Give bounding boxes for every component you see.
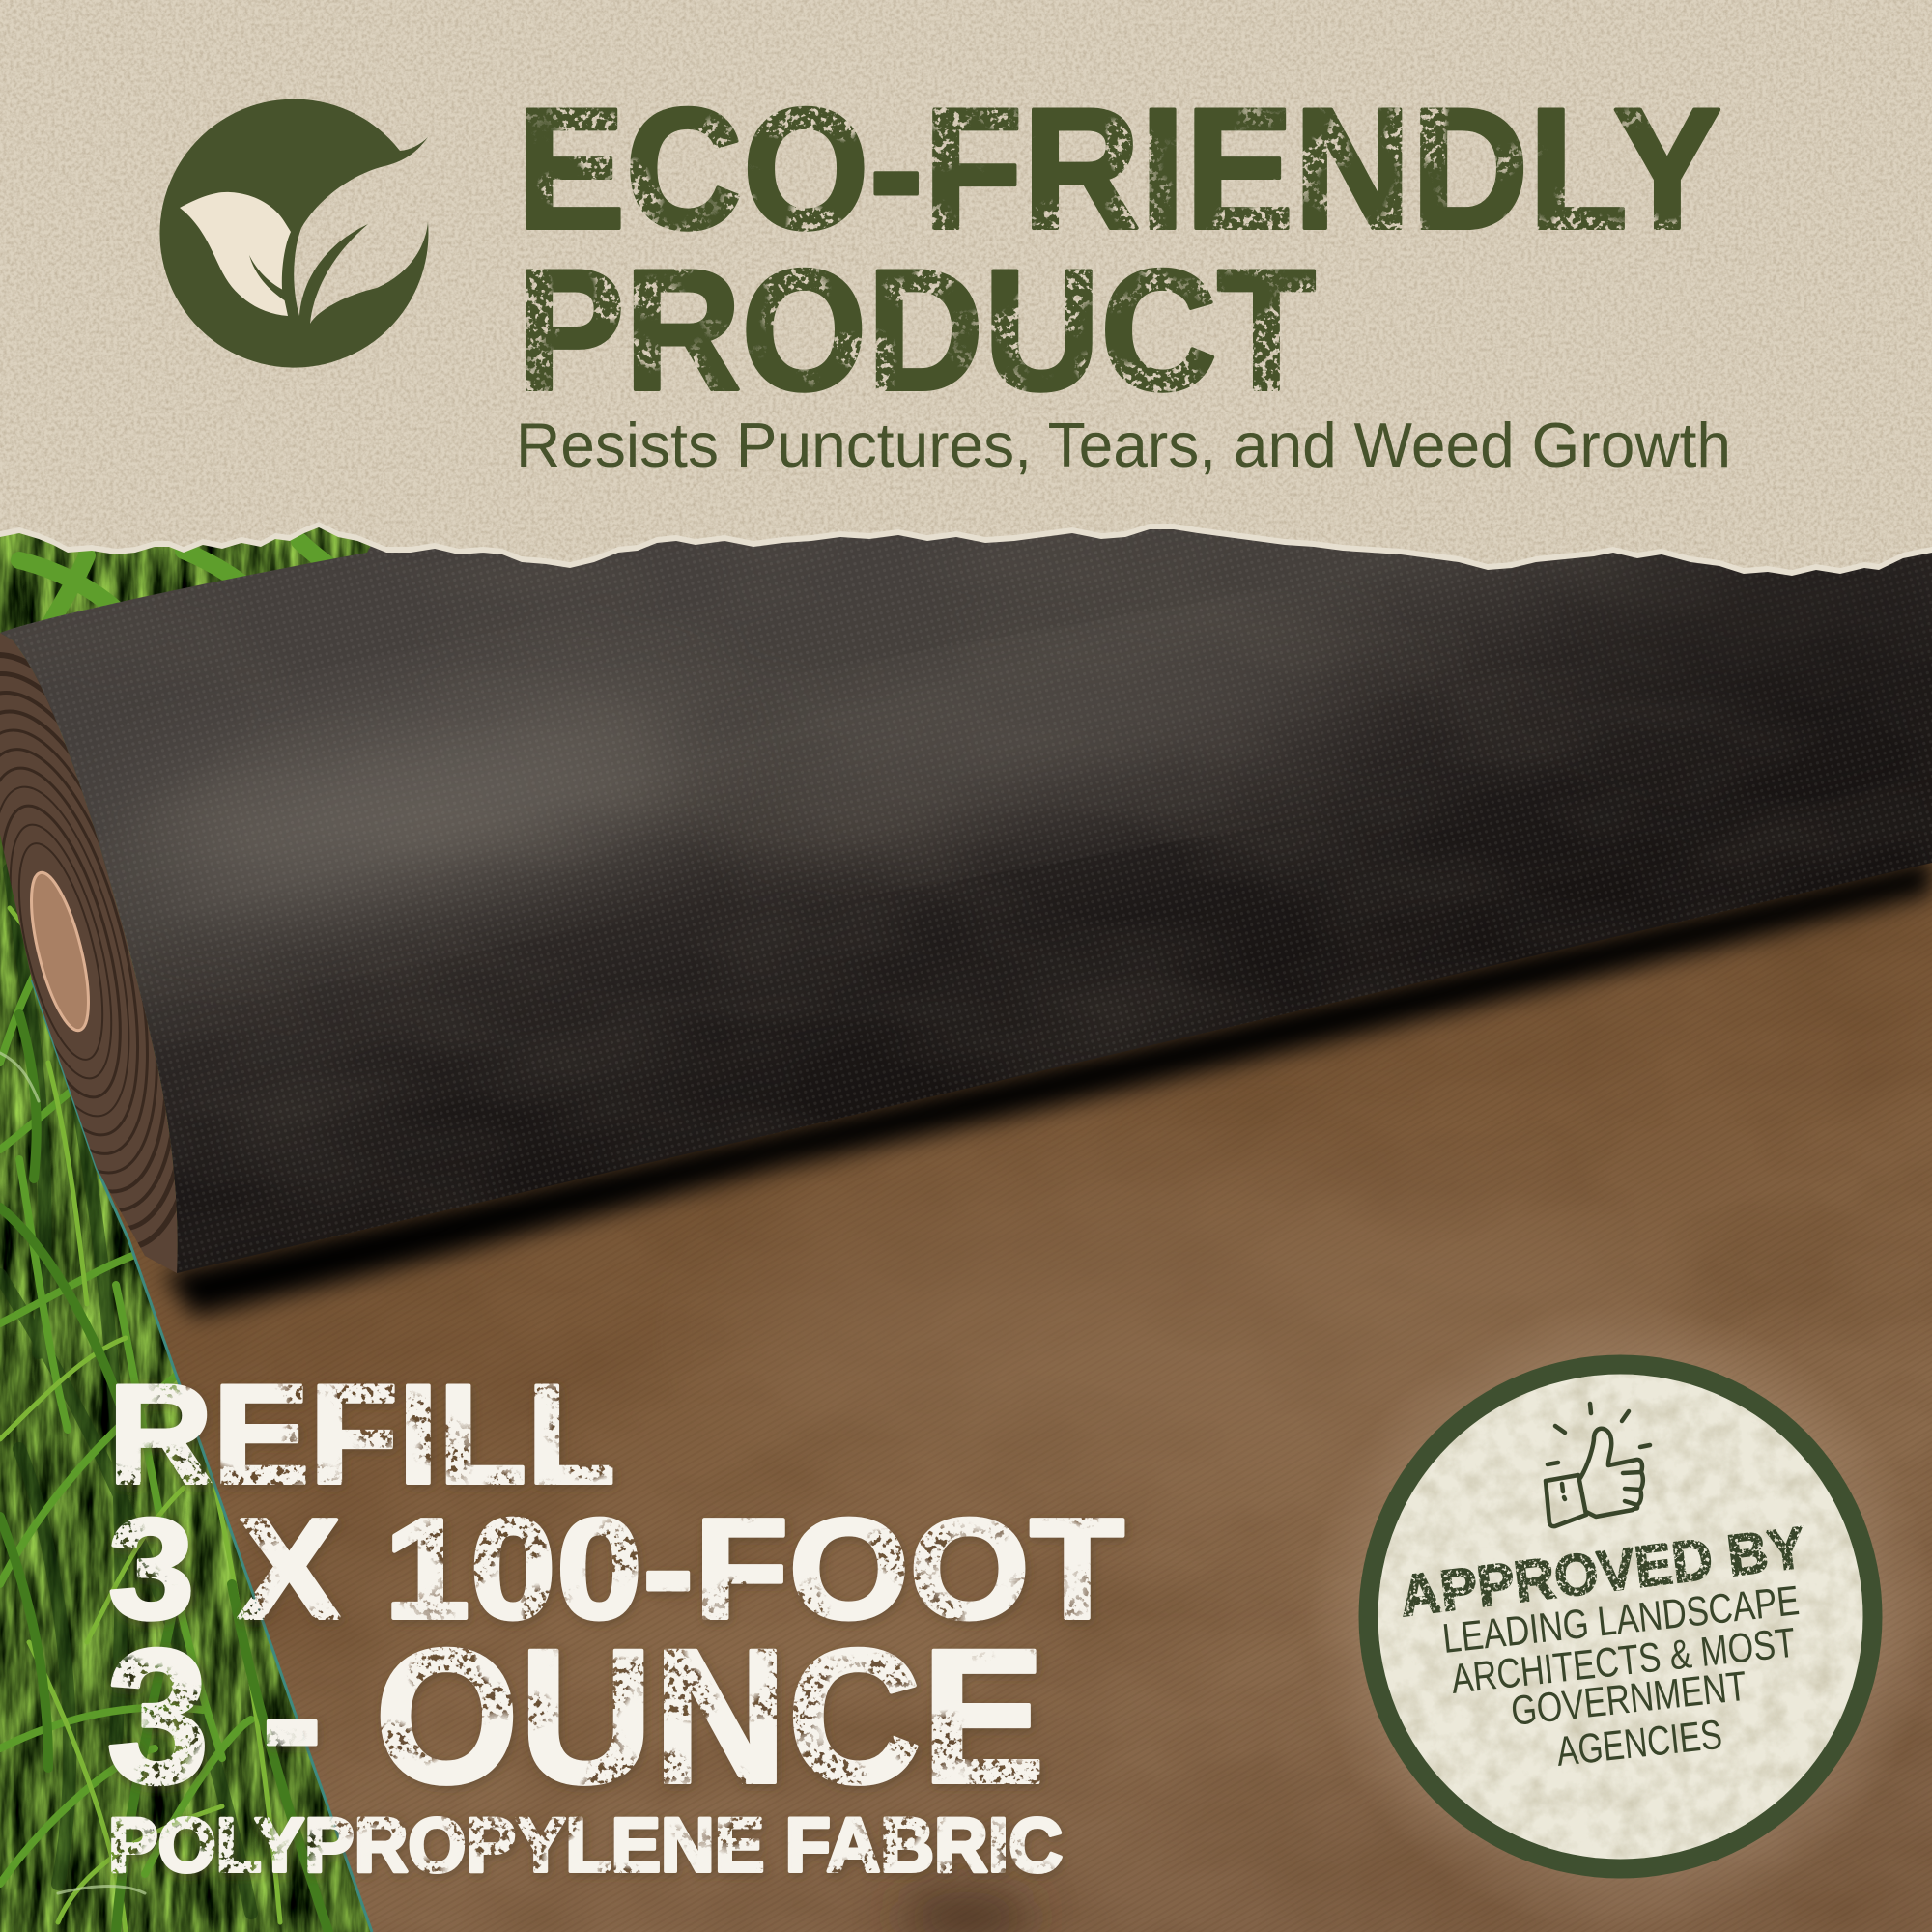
heading line one: ECO-FRIENDLY — [517, 72, 1721, 265]
fabric teal edge — [32, 980, 372, 1932]
detail line three: GOVERNMENT — [1509, 1663, 1749, 1735]
paper surface — [0, 0, 1932, 570]
heading line two: PRODUCT — [517, 234, 1316, 426]
fabric light patch — [724, 1169, 1690, 1497]
approved by detail — [1440, 1577, 1802, 1776]
size line: 3 X 100-FOOT — [108, 1490, 1124, 1649]
title: eco-friendly product — [517, 72, 1721, 426]
icon: eco leaf logo — [159, 99, 428, 368]
roll end cap — [0, 633, 178, 1273]
roll body — [0, 464, 1932, 1273]
torn paper header — [0, 0, 1932, 576]
background: grass — [0, 483, 676, 1932]
cardboard core — [30, 871, 90, 1032]
detail line four: AGENCIES — [1554, 1712, 1724, 1776]
roll highlight — [116, 522, 1932, 943]
product specs text — [106, 1355, 1124, 1888]
brown fabric sheet — [32, 850, 1932, 1932]
icon: thumbs up — [1546, 1404, 1650, 1526]
badge: approved by — [1306, 1303, 1932, 1931]
subtitle: Resists Punctures, Tears, and Weed Growth — [516, 410, 1731, 480]
paper torn fibre edge — [0, 0, 1932, 576]
badge face — [1378, 1374, 1862, 1859]
dark stain at bottom — [898, 1890, 1034, 1932]
weight line: 3 - OUNCE — [106, 1609, 1045, 1823]
detail line one: LEADING LANDSCAPE — [1440, 1577, 1802, 1662]
material line: POLYPROPYLENE FABRIC — [108, 1802, 1063, 1888]
logo cream leaf — [180, 192, 291, 316]
shadow below roll — [164, 858, 1932, 1316]
refill line: REFILL — [108, 1355, 615, 1513]
approved by heading: APPROVED BY — [1396, 1515, 1808, 1629]
badge ring — [1358, 1354, 1882, 1878]
fabric roll — [0, 529, 1932, 1273]
badge halo — [1306, 1303, 1932, 1931]
detail line two: ARCHITECTS & MOST — [1449, 1620, 1798, 1703]
logo small blade — [249, 255, 286, 301]
roll weave texture — [0, 464, 1932, 1273]
logo dark circle with sprout cutout — [159, 99, 428, 368]
